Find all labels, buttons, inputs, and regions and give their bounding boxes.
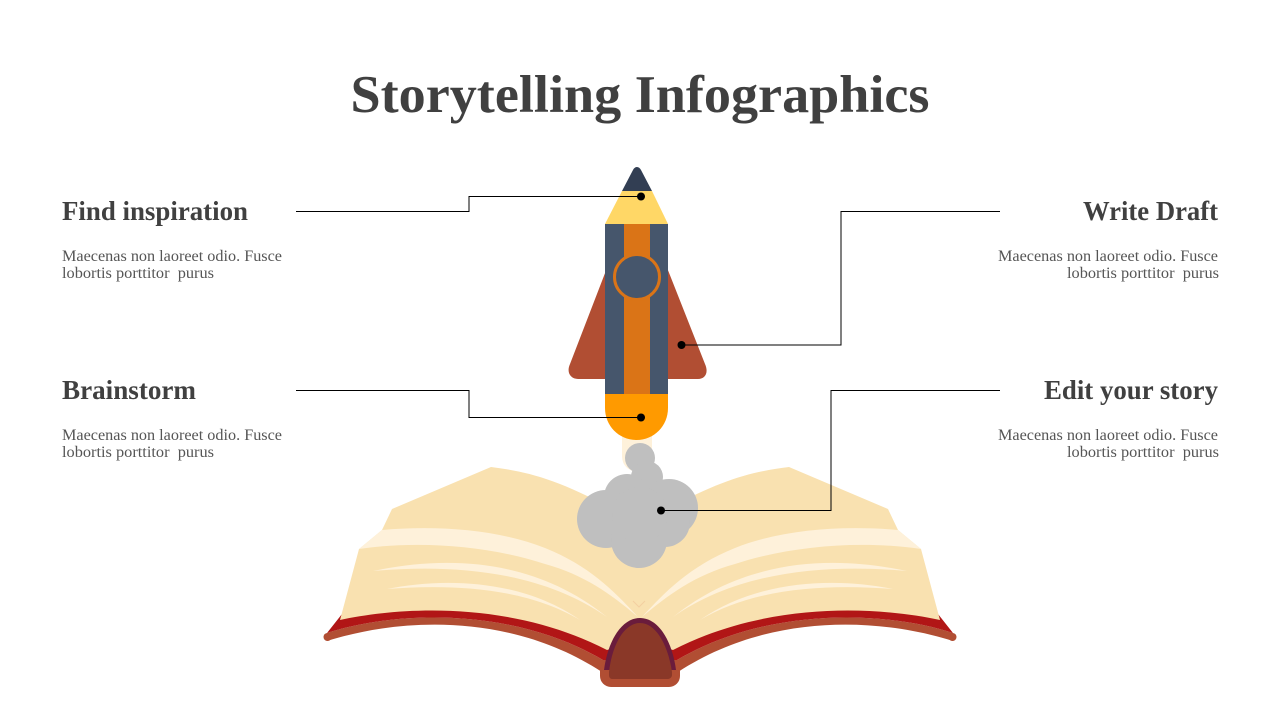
text block: find inspiration: Find inspiration (62, 196, 248, 226)
rocket window (614, 254, 660, 300)
rocket engine base (605, 394, 668, 440)
text block: edit your story: Edit your story (1044, 375, 1218, 405)
rocket flame (622, 436, 652, 472)
book spine (600, 618, 680, 687)
text block: write draft: Write Draft (1083, 196, 1218, 226)
connector: edit your story (657, 390, 1000, 514)
connector: brainstorm (296, 390, 645, 422)
pencil tip (605, 191, 668, 224)
text block: brainstorm: Maecenas non laoreet odio. Fusce (62, 427, 282, 444)
right half of open book (640, 467, 956, 680)
text block: find inspiration: Maecenas non laoreet odio. Fusce (62, 248, 282, 265)
text block: write draft (998, 196, 1219, 282)
text block: write draft: Maecenas non laoreet odio. Fusce (998, 248, 1218, 265)
title: Storytelling Infographics (350, 66, 930, 124)
left half of open book (324, 467, 640, 680)
text block: edit your story: Maecenas non laoreet odio. Fusce (998, 427, 1218, 444)
page fold mark (633, 601, 645, 607)
text block: brainstorm: lobortis porttitor purus (62, 444, 214, 461)
rocket body (605, 224, 668, 394)
book illustration (324, 467, 956, 687)
connector: write draft (678, 212, 1000, 349)
rocket pencil (569, 167, 707, 440)
text block: brainstorm (62, 375, 282, 461)
connector: find inspiration (296, 192, 645, 212)
text block: edit your story (998, 375, 1219, 461)
text block: find inspiration: lobortis porttitor purus (62, 265, 214, 282)
text block: edit your story: lobortis porttitor purus (1067, 444, 1219, 461)
pencil graphite (622, 167, 652, 191)
text block: brainstorm: Brainstorm (62, 375, 197, 405)
body stripe (624, 224, 650, 394)
text block: write draft: lobortis porttitor purus (1067, 265, 1219, 282)
text block: find inspiration (62, 196, 282, 282)
rocket fins (569, 255, 707, 379)
smoke cloud (577, 443, 698, 568)
